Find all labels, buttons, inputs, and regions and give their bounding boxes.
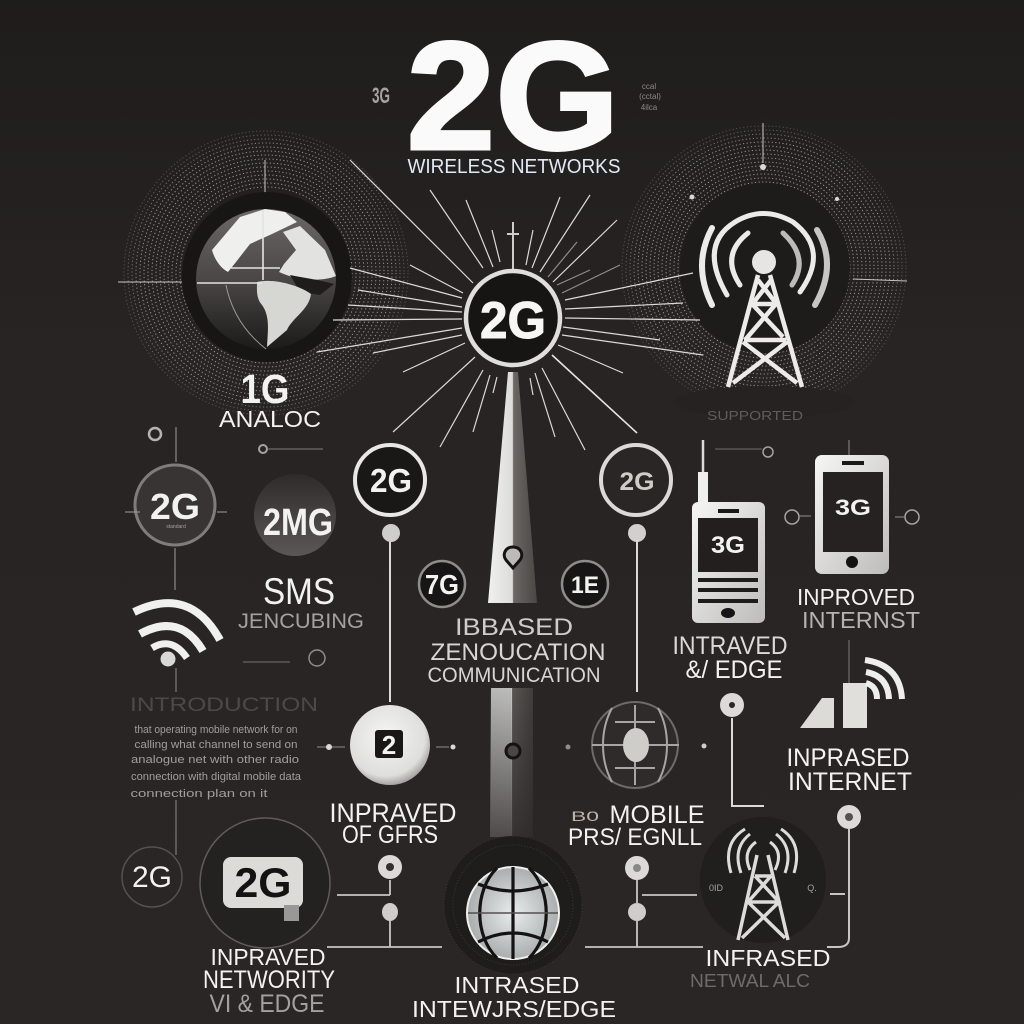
text block: improved internet: INTERNST xyxy=(802,607,920,633)
text block: improved network: INPRAVED xyxy=(210,944,326,970)
side labels: 0ID xyxy=(709,883,723,893)
small mark left: 3G xyxy=(372,83,390,108)
node: outline 2G xyxy=(122,847,182,907)
small pin xyxy=(628,903,646,921)
tiny caption: standard xyxy=(166,524,186,530)
upper mast xyxy=(488,372,537,603)
marker xyxy=(504,547,522,568)
node: white ball 2: 2 xyxy=(382,730,396,760)
connector right xyxy=(827,805,861,947)
text block: improved & edge xyxy=(672,632,788,684)
central 2G hub xyxy=(317,160,703,450)
antenna xyxy=(507,222,519,269)
dotted halo xyxy=(124,131,408,415)
connector ticks xyxy=(125,427,227,590)
connector with pin xyxy=(720,693,764,806)
body xyxy=(815,455,889,574)
text block: introduction xyxy=(130,668,318,855)
label: 2G xyxy=(150,486,200,527)
center xyxy=(623,728,649,762)
paragraph: calling what channel to send on xyxy=(134,739,298,751)
node: bottom tower: Q. xyxy=(807,883,817,893)
small node: 1E xyxy=(562,561,608,607)
pin xyxy=(382,524,400,542)
label: 2G xyxy=(132,861,172,894)
tower icon xyxy=(702,214,827,387)
paragraph: connection plan on it xyxy=(130,788,268,800)
small pin xyxy=(382,903,398,921)
node: compass globe xyxy=(566,702,706,788)
icon: keypad phone xyxy=(692,440,773,623)
text block: improved internet xyxy=(797,584,920,633)
node: 2G badge xyxy=(200,818,330,948)
title: 2G: 2G xyxy=(406,10,620,182)
pin xyxy=(378,855,402,879)
antenna xyxy=(698,472,708,502)
text block: intrased: INTRASED xyxy=(454,972,580,998)
connector xyxy=(389,540,391,702)
screen label: 3G xyxy=(711,532,745,559)
small node: 7G: 7G xyxy=(425,569,459,600)
screen label: 3G xyxy=(835,495,871,520)
text block: SMS: SMS xyxy=(263,571,335,612)
connectors bottom left xyxy=(327,855,442,947)
small dot icon xyxy=(149,428,161,440)
text block: mobile: MOBILE xyxy=(610,801,704,829)
text block: inprased internet: INTERNET xyxy=(788,768,912,796)
text block: improved of GPRS: INPRAVED xyxy=(330,798,456,828)
text block: improved & edge: &/ EDGE xyxy=(686,656,782,684)
text block: improved network: NETWORITY xyxy=(203,966,335,994)
icon: wifi xyxy=(134,603,325,666)
icon: signal bars xyxy=(800,640,902,728)
text block: improved network xyxy=(203,944,335,1018)
cord xyxy=(284,905,299,921)
lower mast xyxy=(490,688,533,837)
paragraph: that operating mobile network for on xyxy=(134,724,298,736)
subtitle: WIRELESS NETWORKS xyxy=(408,156,620,178)
text block: inprased xyxy=(690,945,830,991)
small node: 1E: 1E xyxy=(571,572,599,599)
dots xyxy=(326,744,332,750)
text block: intrased xyxy=(412,972,616,1022)
tower xyxy=(728,829,797,940)
ring xyxy=(466,271,560,365)
text block: mobile xyxy=(568,801,704,851)
home button xyxy=(846,556,858,568)
crosshair ticks xyxy=(763,123,907,281)
icon: smartphone xyxy=(785,440,919,574)
small mark right: (cctal) xyxy=(639,92,661,101)
keypad xyxy=(698,580,758,601)
label: 1G: 1G xyxy=(240,366,290,412)
label: 2G xyxy=(370,462,412,499)
burst rays xyxy=(317,160,703,450)
panel: 1G analog xyxy=(118,131,408,432)
connector xyxy=(636,540,638,692)
pin xyxy=(628,524,646,542)
node: internet globe xyxy=(444,836,582,974)
connector xyxy=(848,440,850,456)
mast line xyxy=(848,640,850,683)
speaker xyxy=(842,461,864,465)
connectors xyxy=(175,668,177,855)
text block: mobile: PRS/ EGNLL xyxy=(568,824,702,851)
text block: center: ZENOUCATION xyxy=(430,639,606,666)
text block: improved of GPRS xyxy=(330,798,456,849)
node: white ball 2 xyxy=(317,705,456,785)
small mark right: 4ilca xyxy=(641,103,658,112)
crosshair ticks xyxy=(118,160,265,282)
small node: 7G xyxy=(419,561,465,607)
caption: SUPPORTED xyxy=(707,408,803,423)
screen xyxy=(698,518,758,572)
home button xyxy=(721,608,735,618)
mast fade xyxy=(490,688,534,837)
sub label: JENCUBING xyxy=(238,610,364,633)
label: 2MG xyxy=(263,502,333,544)
globe icon xyxy=(182,192,352,362)
paragraph: connection with digital mobile data xyxy=(131,771,302,783)
meridians xyxy=(478,867,548,959)
label: 2G xyxy=(480,292,546,350)
side icons xyxy=(785,510,799,524)
text block: SMS xyxy=(238,571,364,633)
node: ring 2G right xyxy=(601,445,671,692)
disc xyxy=(680,183,850,353)
dark halo xyxy=(444,836,582,974)
central tower mast xyxy=(488,372,537,837)
body xyxy=(692,502,765,623)
pin xyxy=(625,856,649,880)
marker lower xyxy=(506,744,520,758)
label: analog: ANALOC xyxy=(219,406,321,432)
connectors xyxy=(317,746,449,748)
connector xyxy=(715,448,762,450)
text block: inprased: NETWAL ALC xyxy=(690,971,810,991)
text block: mobile: B0 xyxy=(571,808,599,824)
screen xyxy=(823,472,883,552)
text block: improved network: VI & EDGE xyxy=(210,990,324,1018)
node: bottom tower xyxy=(700,817,826,943)
text block: inprased: INFRASED xyxy=(706,945,830,971)
title xyxy=(372,10,661,182)
small dot icon xyxy=(309,650,325,666)
text block: center xyxy=(428,614,606,687)
small pointer xyxy=(259,445,323,453)
text block: center: COMMUNICATION xyxy=(428,664,600,687)
paragraph xyxy=(130,724,302,800)
dotted halo xyxy=(622,126,906,410)
text block: inprased internet xyxy=(786,744,912,796)
connectors bottom right xyxy=(585,856,703,947)
badge xyxy=(223,857,303,908)
text block: improved of GPRS: OF GFRS xyxy=(342,821,438,849)
label: 2G xyxy=(620,468,654,496)
text block: center: IBBASED xyxy=(455,614,573,641)
text block: improved & edge: INTRAVED xyxy=(672,632,788,660)
dark disc xyxy=(700,817,826,943)
heading: INTRODUCTION xyxy=(130,695,318,716)
paragraph: analogue net with other radio xyxy=(131,754,299,766)
panel: signal tower xyxy=(622,123,907,423)
equator xyxy=(468,912,558,914)
dot xyxy=(763,447,773,457)
label: 2G xyxy=(234,859,292,906)
dots xyxy=(690,164,839,201)
node: 2MG xyxy=(254,474,336,556)
connector xyxy=(243,661,290,663)
text block: improved internet: INPROVED xyxy=(797,584,915,610)
small mark right xyxy=(639,82,661,112)
text block: intrased: INTEWJRS/EDGE xyxy=(412,996,616,1022)
node: ring 2G left xyxy=(355,445,425,702)
speaker xyxy=(718,509,739,513)
text block: inprased internet: INPRASED xyxy=(786,744,910,772)
badge xyxy=(375,730,403,758)
small mark right: ccal xyxy=(642,82,656,91)
side dots xyxy=(702,744,706,748)
wifi arcs xyxy=(865,660,902,699)
left node: 2G ring xyxy=(125,427,227,590)
bottom shadow xyxy=(675,386,855,418)
